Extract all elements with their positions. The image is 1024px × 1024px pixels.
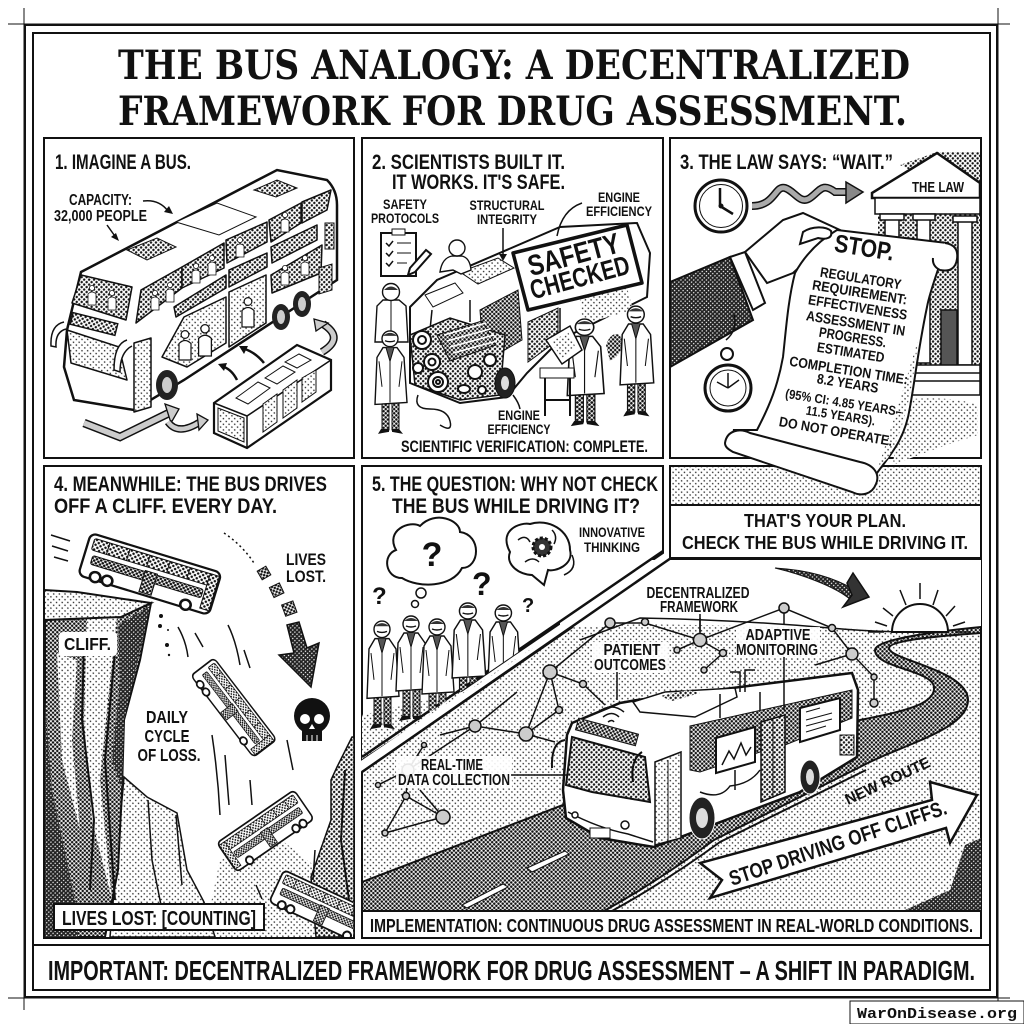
hand and sleeve [670,213,840,367]
scientists [375,240,654,434]
network labels: DATA COLLECTION [398,772,510,789]
lives lost label: LOST. [286,568,326,586]
squiggle arrow [752,182,863,206]
new route arrow banner [700,754,977,898]
scroll text: REGULATORY [819,264,903,292]
network labels: MONITORING [736,642,818,659]
scroll [725,230,957,494]
icon: brain with gear [507,522,574,585]
lives lost counter [54,904,264,930]
scroll text: PROGRESS. [818,324,888,350]
scroll text: 11.5 YEARS). [805,403,876,428]
falling bus 1 [78,533,222,617]
ground and second rock [110,737,354,937]
assembly arrows [84,319,334,437]
motion lines [51,535,315,899]
cliff label: CLIFF. [64,634,111,654]
innovative thinking label [579,525,645,555]
falling bus 4 [270,870,353,937]
safety labels: ENGINE [598,189,640,205]
daily cycle label: CYCLE [144,726,190,746]
thought cloud: ? [422,536,442,574]
lives lost label [286,551,326,586]
falling dashes and big arrow [224,533,319,687]
road [362,627,981,911]
heading 5: 5. THE QUESTION: WHY NOT CHECK [372,473,658,496]
new route arrow banner: NEW ROUTE [843,754,933,809]
question marks: ? [522,595,534,617]
heading 4: OFF A CLIFF. EVERY DAY. [54,495,277,518]
scroll text: ASSESSMENT IN [805,307,906,339]
scroll text: COMPLETION TIME: [788,353,909,387]
heading 3: 3. THE LAW SAYS: “WAIT.” [680,151,893,174]
network labels: PATIENT [604,642,661,659]
plan callout [670,505,981,558]
title [118,42,910,135]
exploded module [214,345,331,448]
curved arrow to sun [775,568,869,607]
heading 2 [372,151,565,194]
heading 4: 4. MEANWHILE: THE BUS DRIVES [54,473,327,496]
daily cycle label [138,707,200,765]
plan callout: CHECK THE BUS WHILE DRIVING IT. [682,532,968,553]
stippled ground behind thinkers [362,640,545,759]
engine [410,318,515,428]
clipboard icon [381,229,431,276]
thought cloud [387,518,476,608]
panel 1: imagine a bus [44,138,354,458]
falling rocks [158,614,170,656]
panel 2: scientists built it [362,138,663,458]
falling buses [78,533,353,937]
panel 3: the law says wait [670,138,981,494]
title: FRAMEWORK FOR DRUG ASSESSMENT. [118,88,907,135]
heading 4 [54,473,327,518]
network labels: DECENTRALIZED [646,585,750,602]
new route arrow banner: STOP DRIVING OFF CLIFFS. [726,797,950,891]
safety labels: ENGINE [498,407,540,423]
scroll text: ESTIMATED [816,339,886,365]
network labels [396,585,820,789]
question marks [372,566,534,617]
sun [868,583,971,632]
implementation caption [362,911,981,938]
heading 1: 1. IMAGINE A BUS. [55,151,191,174]
lower-right cliff [905,838,981,910]
daily cycle label: OF LOSS. [138,745,200,765]
heading 2: 2. SCIENTISTS BUILT IT. [372,151,565,174]
law building: THE LAW [912,180,964,196]
double-decker bus [51,170,337,412]
safety checked sign: CHECKED [527,250,633,305]
thinking scientists [367,603,521,729]
left cliff [44,590,151,937]
daily cycle label: DAILY [146,707,188,727]
icon: skull [294,698,330,741]
wall clock icon [695,180,747,232]
scroll text: (95% CI: 4.85 YEARS– [784,386,903,419]
lives lost label: LIVES [286,551,326,569]
safety checked sign [513,225,642,310]
falling bus 3 [217,790,315,873]
safety labels: EFFICIENCY [488,421,551,437]
plan callout: THAT'S YOUR PLAN. [744,510,906,531]
safety labels: INTEGRITY [477,211,538,227]
panel 5: the question [362,466,981,938]
safety labels [371,189,653,437]
network labels: REAL-TIME [421,757,483,774]
safety checked sign: SAFETY [524,228,623,283]
network labels: ADAPTIVE [746,627,810,644]
site tag [850,1001,1024,1024]
innovative thinking label: THINKING [584,540,640,555]
lives lost counter: LIVES LOST: [COUNTING] [62,908,256,930]
network labels: FRAMEWORK [660,599,739,616]
capacity label: CAPACITY: [69,192,132,209]
innovative thinking label: INNOVATIVE [579,525,645,540]
pocket watch [705,315,751,411]
safety labels: PROTOCOLS [371,210,439,226]
law building [870,152,980,465]
van with open engine [410,223,650,403]
verification caption: SCIENTIFIC VERIFICATION: COMPLETE. [401,438,648,456]
capacity label: 32,000 PEOPLE [54,208,147,225]
network labels: OUTCOMES [594,657,666,674]
safety labels: EFFICIENCY [586,203,653,219]
panel 4: bus drives off a cliff [44,466,378,947]
title: THE BUS ANALOGY: A DECENTRALIZED [118,42,910,89]
scroll text [778,230,909,449]
scroll text: 8.2 YEARS [816,370,880,396]
scroll text: EFFECTIVENESS [807,291,908,323]
safety labels: STRUCTURAL [470,197,545,213]
heading 5 [372,473,658,518]
falling bus 2 [190,658,277,758]
safety labels: SAFETY [383,196,428,212]
question marks: ? [372,583,387,610]
data network [376,603,878,836]
top-right halftone band [670,466,981,506]
question marks: ? [472,566,492,602]
heading 5: THE BUS WHILE DRIVING IT? [392,495,640,518]
scroll text: STOP. [832,230,896,267]
thumb [800,227,831,244]
site tag: WarOnDisease.org [857,1006,1017,1023]
heading 2: IT WORKS. IT'S SAFE. [392,171,565,194]
sensor bus [552,670,858,847]
scroll text: DO NOT OPERATE. [778,413,894,449]
capacity label [54,192,173,241]
scroll text: REQUIREMENT: [811,277,908,307]
lower scene background [362,551,981,938]
